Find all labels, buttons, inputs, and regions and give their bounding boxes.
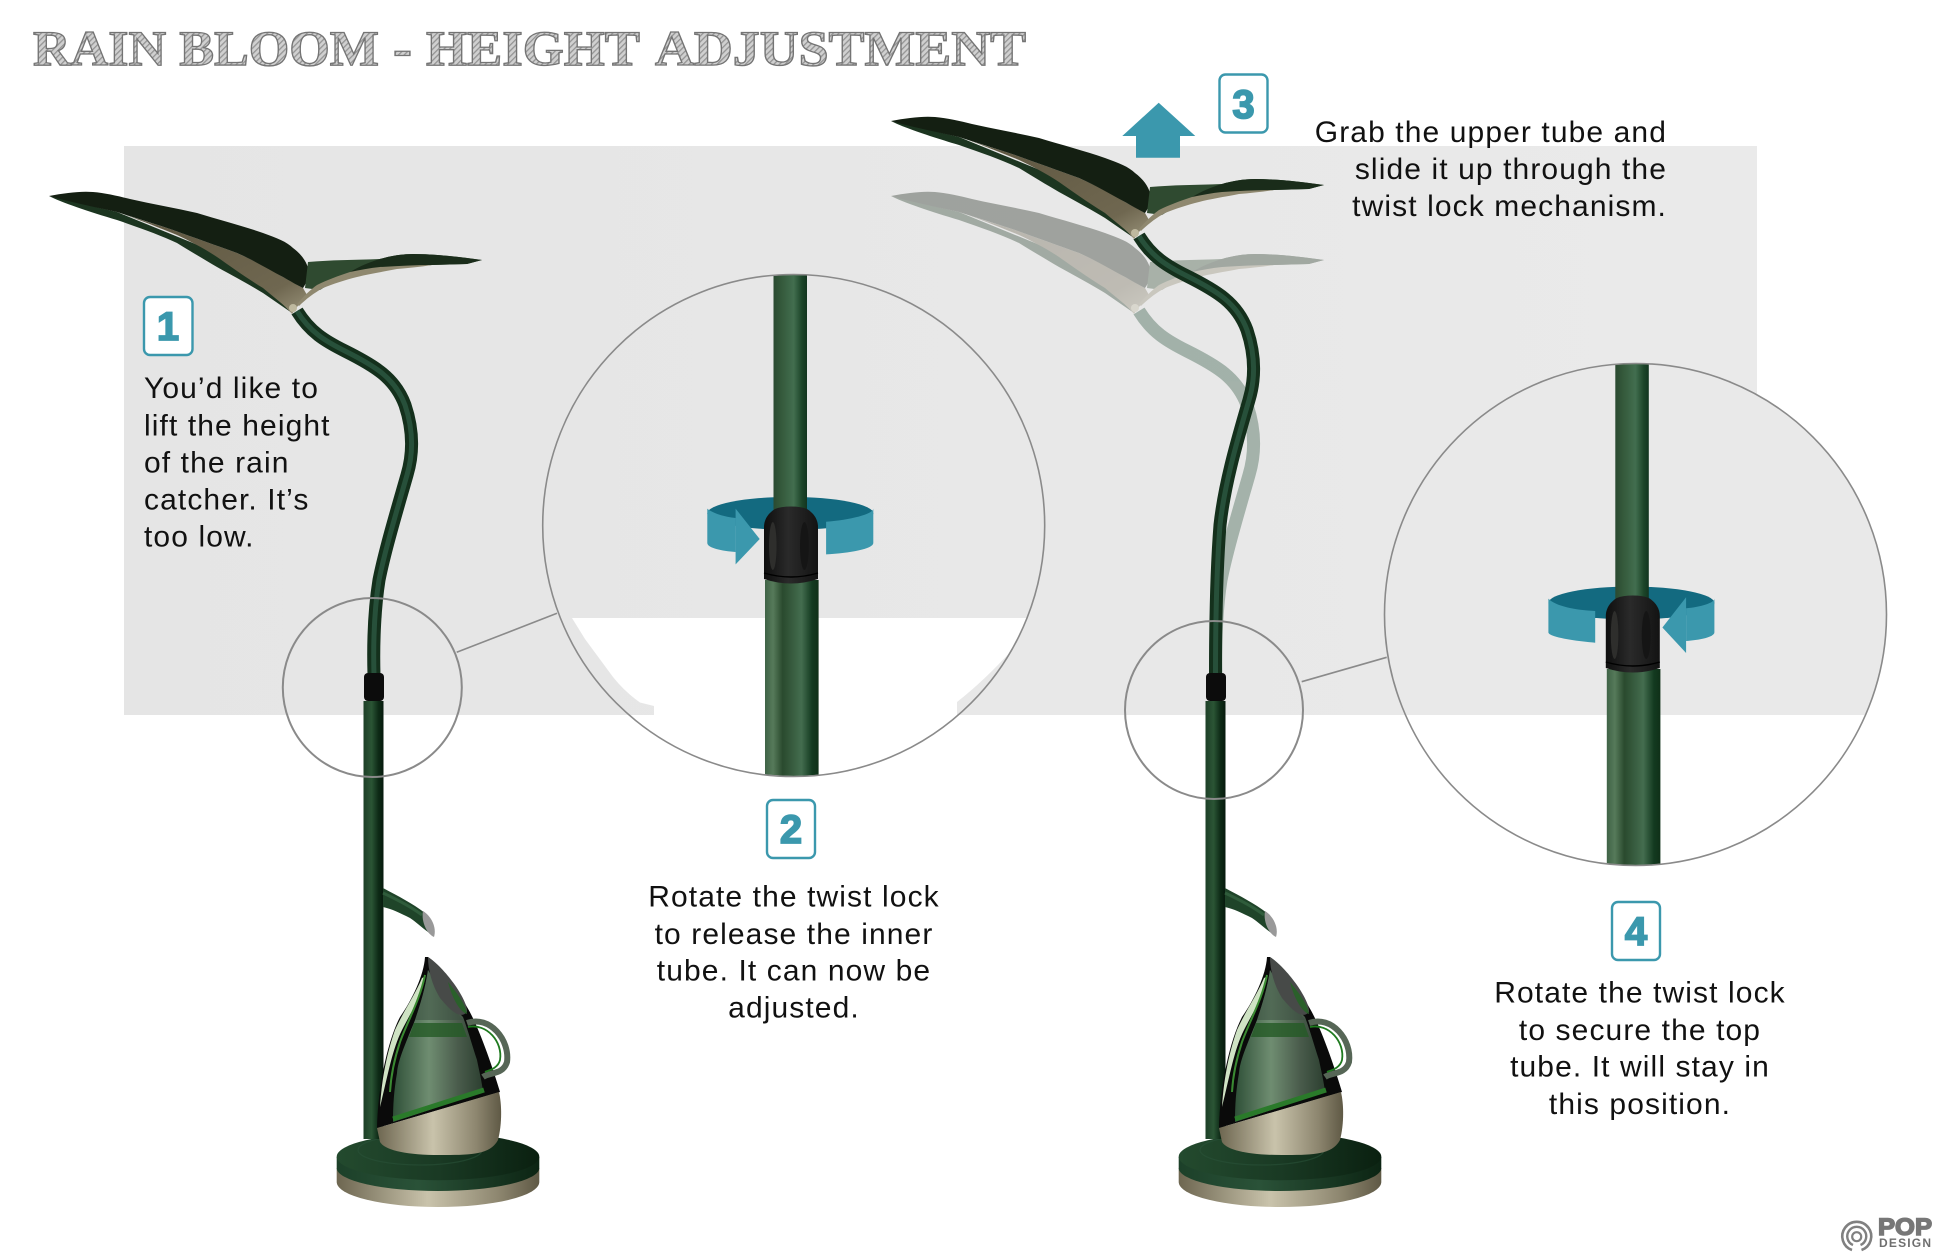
step 1 text: catcher. It’s: [144, 484, 310, 516]
small detail circle right: [1125, 621, 1303, 799]
step 2 text: adjusted.: [728, 992, 860, 1024]
circle outline left: [543, 274, 1045, 776]
background panel: [124, 146, 1757, 715]
step 4 badge: 4: [1625, 910, 1648, 954]
small detail circle left: [283, 598, 462, 777]
step 2 badge: [767, 800, 815, 858]
step 4 badge: [1612, 902, 1660, 960]
step 4 text: [1494, 976, 1786, 1121]
twist lock collar right: [1606, 596, 1660, 672]
twist lock collar left: [764, 506, 818, 584]
rotation arrow right, back of ring: [1548, 586, 1714, 620]
step 4 text: Rotate the twist lock: [1494, 976, 1786, 1010]
lamp 2 twist lock: [1206, 673, 1226, 701]
step 2 text: [648, 880, 940, 1024]
step 1 text: You’d like to: [144, 372, 319, 405]
rotation arrow right, front bands: [1548, 597, 1714, 653]
logo: POP Design: [1842, 1214, 1932, 1250]
step 3 text: twist lock mechanism.: [1352, 190, 1667, 223]
up arrow: [1122, 103, 1195, 158]
lamp 1 stem: [297, 311, 412, 675]
step 3 badge: [1220, 74, 1268, 132]
lamp 1 twist lock: [364, 673, 384, 701]
zoom circle left: twist lock release: [543, 270, 1050, 780]
step 2 text: tube. It can now be: [657, 954, 931, 988]
telescoping tube left: [765, 270, 819, 780]
step 2 badge: 2: [780, 808, 802, 852]
telescoping tube right: [1607, 359, 1660, 869]
ghost of previous position: [891, 192, 1324, 675]
step 4 text: to secure the top: [1519, 1014, 1761, 1047]
step 1 badge: 1: [157, 305, 179, 349]
step 1 text: too low.: [144, 520, 255, 554]
step 3 text: slide it up through the: [1355, 153, 1667, 186]
title: ADJUSTMENT: [655, 20, 1026, 76]
step 1 text: lift the height: [144, 410, 331, 442]
title: HEIGHT: [426, 20, 640, 76]
step 1 text: of the rain: [144, 446, 290, 480]
step 1: lamp at low height: [49, 192, 539, 1207]
logo: POP Design: DESIGN: [1879, 1236, 1931, 1250]
connector right: [1302, 657, 1387, 682]
logo: POP Design: POP: [1878, 1214, 1932, 1241]
step 1 text: [144, 372, 331, 554]
lamp 2 rain catcher leaf: [891, 117, 1324, 239]
step 3 badge: 3: [1232, 83, 1255, 127]
circle outline right: [1384, 364, 1886, 866]
step 3 text: Grab the upper tube and: [1315, 116, 1667, 149]
step 2 text: Rotate the twist lock: [648, 880, 940, 914]
lamp 2 stem: [1139, 236, 1254, 675]
step 1 badge: [144, 297, 192, 355]
connector left: [457, 613, 557, 652]
rotation arrow left, back of ring: [707, 497, 873, 530]
title: -: [393, 20, 412, 76]
title: [33, 20, 1026, 76]
step 3: lamp raised with ghost: [891, 117, 1381, 1207]
step 3 text: [1315, 116, 1667, 223]
lamp 1 stand and pitcher: [337, 701, 539, 1207]
step 4 text: this position.: [1549, 1088, 1731, 1121]
lamp 2 stand and pitcher: [1179, 701, 1381, 1207]
title: RAIN BLOOM: [33, 20, 379, 76]
zoom circle right: twist lock secure: [1384, 359, 1888, 869]
rotation arrow left, front bands: [707, 509, 873, 564]
step 2 text: to release the inner: [655, 918, 933, 951]
step 4 text: tube. It will stay in: [1510, 1050, 1770, 1084]
lamp 1 rain catcher leaf: [49, 192, 482, 314]
